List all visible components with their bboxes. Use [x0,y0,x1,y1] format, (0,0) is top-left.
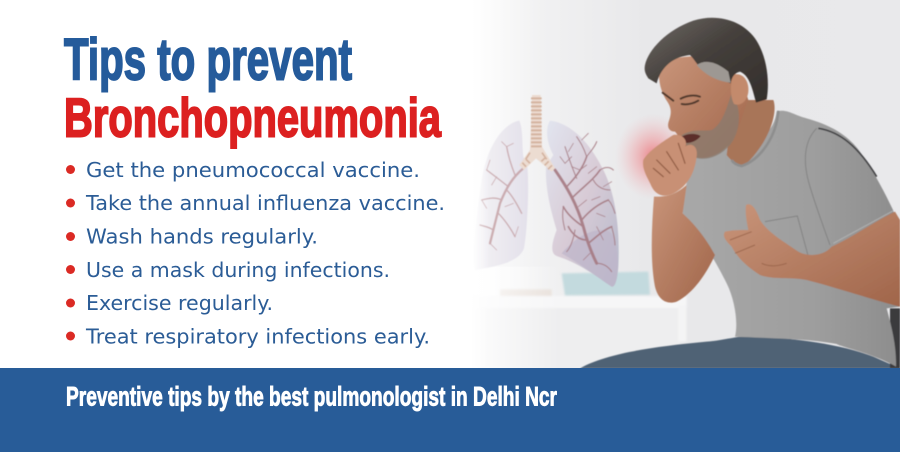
background wall [440,0,900,368]
lung lower shading [562,230,618,287]
beard [682,93,739,159]
sleeve seam and pocket [765,128,893,257]
hair [645,18,768,103]
blue box on shelf [562,272,650,295]
tip 2: Take the annual influenza vaccine. [85,191,445,215]
grey temple [697,62,731,83]
eye and brow [663,93,700,104]
left lung [474,121,528,270]
jeans [580,336,900,368]
t-shirt [683,111,900,367]
collar [732,111,778,166]
coughing arm and fist [643,135,715,303]
tip 4: Use a mask during infections. [86,258,390,282]
man figure [580,18,900,368]
photo scene: lungs and coughing man [440,18,900,370]
white shelf [473,289,687,368]
arm and hand on chest [724,204,900,307]
face [659,56,748,158]
tip 1: Get the pneumococcal vaccine. [86,158,420,182]
tips list [66,158,445,348]
chair edge [890,308,900,368]
title line two: Bronchopneumonia [64,86,441,148]
footer text: Preventive tips by the best pulmonologist in Delhi Ncr [66,382,557,412]
ear [731,74,748,105]
dark shoulder shadow [818,128,877,177]
right lung [546,121,619,287]
tip 5: Exercise regularly. [86,291,273,315]
title line one: Tips to prevent [64,28,352,92]
red glow behind fist [615,113,692,200]
lungs illustration [474,95,619,287]
tip 6: Treat respiratory infections early. [85,324,430,348]
trachea and bronchi [519,95,555,172]
soft white fade on scene's left edge [440,0,490,368]
tip 3: Wash hands regularly. [86,224,318,248]
footer band [0,368,900,452]
bronchial tree left [480,142,523,250]
fade over shelf [440,267,560,370]
neck [727,100,775,165]
bronchial tree right [555,133,615,272]
mouth [682,134,701,143]
